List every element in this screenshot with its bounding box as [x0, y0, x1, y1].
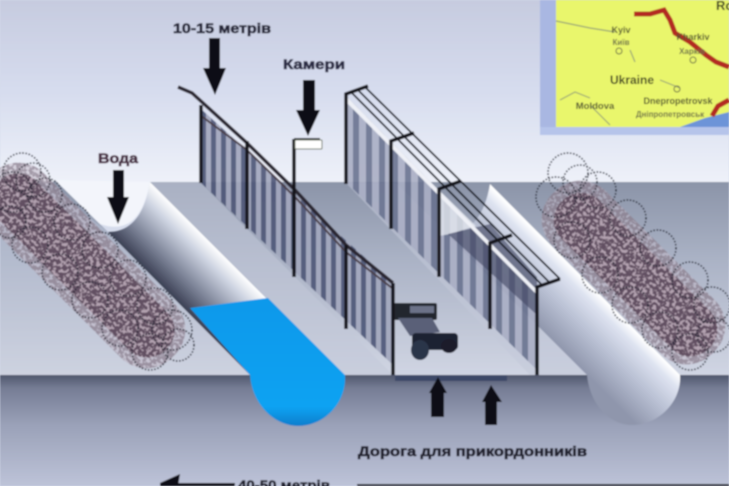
empty trench — [447, 184, 680, 425]
label: water: Вода — [98, 150, 138, 166]
arrow: water — [107, 170, 129, 224]
trench with water — [108, 182, 345, 426]
map labels: Kharkiv — [676, 32, 710, 42]
map labels — [576, 0, 729, 119]
arrow: cameras — [296, 80, 320, 136]
map rivers — [556, 21, 680, 125]
front wall — [0, 375, 729, 486]
map labels: Київ — [613, 38, 630, 47]
fence posts — [201, 105, 393, 375]
map inset — [540, 0, 729, 135]
fence posts — [346, 86, 560, 375]
width dimension — [160, 474, 729, 486]
map labels: Moldova — [576, 101, 615, 112]
barbed wire left — [0, 148, 200, 383]
border line — [634, 10, 729, 67]
fence top rail — [178, 87, 393, 283]
map labels: Харків — [679, 47, 705, 56]
arrow: road right — [482, 385, 502, 425]
sky background — [0, 0, 729, 182]
fence near trench — [178, 87, 393, 375]
arrow: fence height — [203, 38, 226, 95]
barbed wire right — [527, 153, 729, 379]
label: cameras: Камери — [283, 56, 345, 72]
arrow: road left — [429, 377, 447, 417]
label: 10-15 metres: 10-15 метрів — [173, 20, 271, 36]
water — [190, 298, 345, 426]
double fence — [346, 86, 560, 375]
map labels: Kyiv — [611, 25, 631, 35]
camera pole — [294, 139, 322, 277]
map labels: Dnepropetrovsk — [643, 96, 713, 106]
ground plane — [0, 180, 729, 375]
fence rails — [352, 87, 560, 286]
label: road for border guards: Дорога для прикордонників — [358, 443, 587, 459]
map labels: Дніпропетровськ — [636, 110, 705, 119]
camera — [295, 140, 322, 149]
trench far side — [55, 180, 150, 227]
map labels: Ukraine — [610, 73, 654, 87]
road vehicle — [392, 303, 458, 360]
